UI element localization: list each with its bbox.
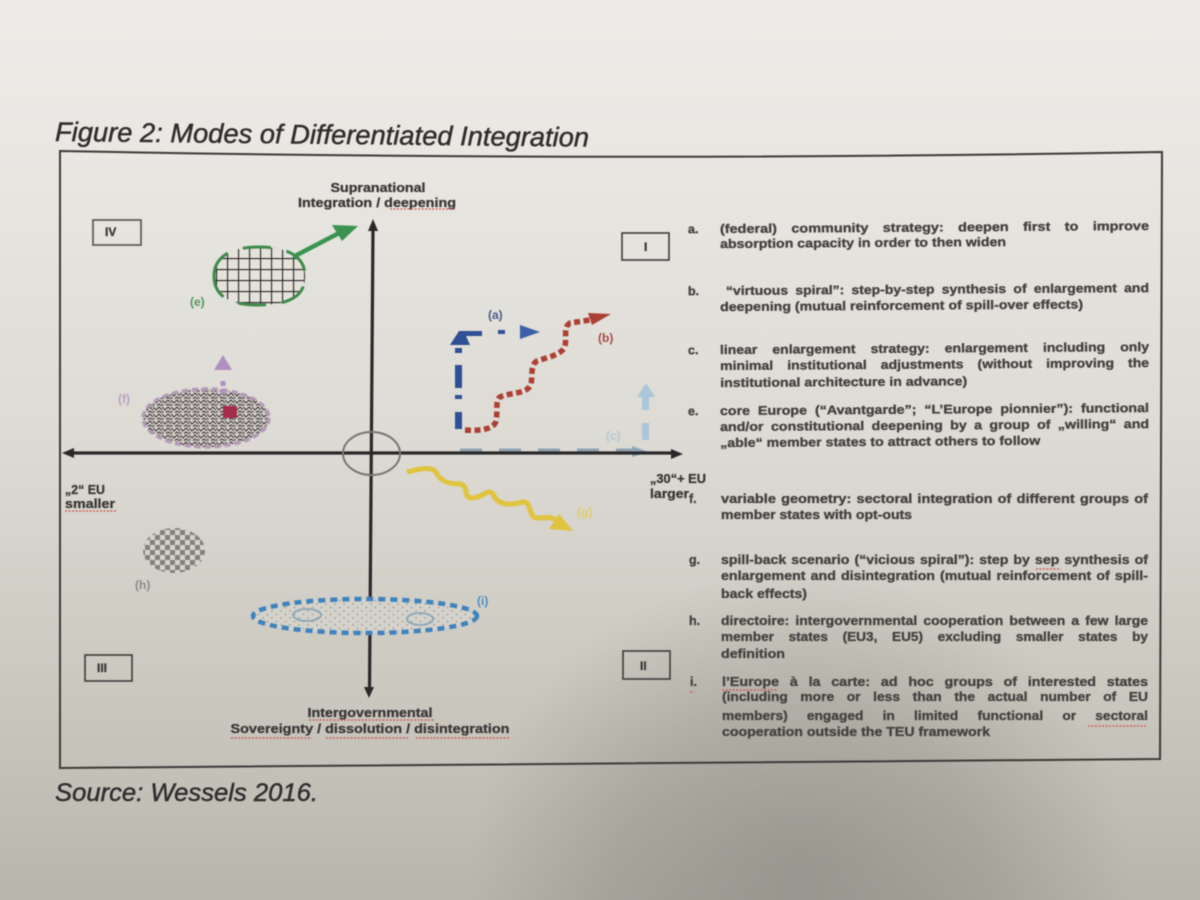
legend item i: (including more or less than the actual number of EU	[722, 690, 1148, 704]
legend item a	[688, 219, 1149, 251]
legend item b: “virtuous spiral”: step-by-step synthesis of enlargement and	[726, 281, 1149, 298]
axis label: bottom: Intergovernmental	[308, 705, 432, 720]
mode e: core Europe grid with green arrow	[190, 225, 358, 309]
legend item a: absorption capacity in order to then widen	[720, 235, 1006, 251]
quadrant box I: I	[644, 240, 647, 254]
mode e: core Europe grid with green arrow: (e)	[190, 295, 205, 309]
vertical axis arrow	[370, 228, 373, 690]
axis label: right: „30“+ EU	[650, 472, 706, 486]
legend item a: (federal) community strategy: deepen first to improve	[720, 219, 1149, 236]
centre circle	[343, 432, 400, 475]
quadrant box IV: IV	[105, 225, 116, 239]
mode h: directoire checker blob	[135, 528, 205, 592]
legend item i: cooperation outside the TEU framework	[722, 725, 990, 739]
mode b: red dotted spiral arrow: (b)	[598, 331, 613, 345]
axis label: left	[65, 483, 116, 511]
legend item e: e.	[688, 404, 698, 418]
legend item i: members) engaged in limited functional or sectoral	[722, 709, 1148, 723]
quadrant box III: III	[97, 661, 107, 675]
mode g: yellow spill-back wave arrow	[407, 469, 592, 531]
axis label: right: larger	[650, 487, 689, 501]
legend item h: member states (EU3, EU5) excluding smaller states by	[721, 630, 1148, 644]
legend item g	[689, 553, 1149, 601]
mode a: blue dash-dot arrow	[450, 308, 540, 429]
legend item f: variable geometry: sectoral integration of different groups of	[721, 492, 1149, 506]
mode i: a la carte dotted ellipse	[253, 594, 488, 633]
mode h: directoire checker blob: (h)	[135, 578, 150, 592]
legend item h: directoire: intergovernmental cooperation between a few large	[721, 614, 1148, 628]
legend item i: l’Europe à la carte: ad hoc groups of interested states	[722, 675, 1148, 689]
quadrant box II: II	[640, 659, 647, 673]
legend item c: minimal institutional adjustments (without improving the	[720, 356, 1149, 373]
legend item c: institutional architecture in advance)	[720, 374, 967, 390]
quadrant box I	[622, 233, 669, 260]
legend item f: f.	[689, 492, 697, 506]
axis label: left: „2“ EU	[65, 483, 105, 497]
legend item h: definition	[721, 647, 785, 661]
legend item e: core Europe (“Avantgarde”; “L’Europe pionnier”): functional	[720, 401, 1149, 418]
axis label: top: Supranational	[330, 181, 426, 195]
mode c: light blue enlargement arrow: (c)	[606, 429, 621, 443]
chart: integration axes	[62, 219, 683, 698]
mode f: variable geometry ellipse	[118, 355, 269, 447]
legend item b: deepening (mutual reinforcement of spill-over effects)	[720, 297, 1083, 314]
legend item c: c.	[688, 343, 698, 357]
quadrant box III	[85, 655, 132, 681]
legend item e: and/or constitutional deepening by a group of „willing“ and	[720, 417, 1149, 434]
mode f: variable geometry ellipse: (f)	[118, 392, 130, 406]
axis label: bottom: Sovereignty / dissolution / disintegration	[230, 721, 510, 736]
legend item e: „able“ member states to attract others to follow	[720, 434, 1041, 450]
legend item g: g.	[689, 553, 700, 567]
legend item b	[688, 281, 1149, 314]
legend item a: a.	[688, 222, 698, 236]
axis label: top	[298, 181, 456, 210]
quadrant box IV	[93, 220, 141, 245]
axis label: bottom	[230, 705, 510, 738]
axis label: top: Integration / deepening	[298, 196, 456, 210]
mode g: yellow spill-back wave arrow: (g)	[577, 505, 592, 519]
title: Figure 2: Modes of Differentiated Integration	[55, 117, 589, 153]
legend item f	[689, 492, 1149, 522]
legend item c: linear enlargement strategy: enlargement including only	[720, 340, 1149, 357]
axis label: left: smaller	[65, 497, 115, 511]
panel: figure frame	[60, 151, 1162, 768]
horizontal axis arrow	[72, 451, 672, 455]
mode c: light blue enlargement arrow	[460, 383, 655, 457]
legend item i: i.	[690, 675, 697, 689]
axis label: right	[650, 472, 706, 501]
legend text	[688, 219, 1149, 739]
legend item e	[688, 401, 1149, 450]
quadrant box II	[623, 651, 670, 679]
mode b: red dotted spiral arrow	[465, 313, 613, 430]
legend item b: b.	[688, 284, 699, 298]
source note: Source: Wessels 2016.	[55, 779, 318, 807]
legend item g: back effects)	[721, 587, 807, 601]
legend item g: spill-back scenario (“vicious spiral”): step by sep synthesis of	[721, 553, 1149, 567]
legend item i	[690, 675, 1148, 739]
legend item c	[688, 340, 1149, 390]
legend item h	[689, 614, 1148, 661]
legend item g: enlargement and disintegration (mutual reinforcement of spill-	[721, 569, 1148, 583]
mode i: a la carte dotted ellipse: (i)	[477, 594, 488, 608]
legend item f: member states with opt-outs	[721, 508, 912, 522]
legend item h: h.	[689, 614, 700, 628]
mode a: blue dash-dot arrow: (a)	[488, 308, 503, 322]
